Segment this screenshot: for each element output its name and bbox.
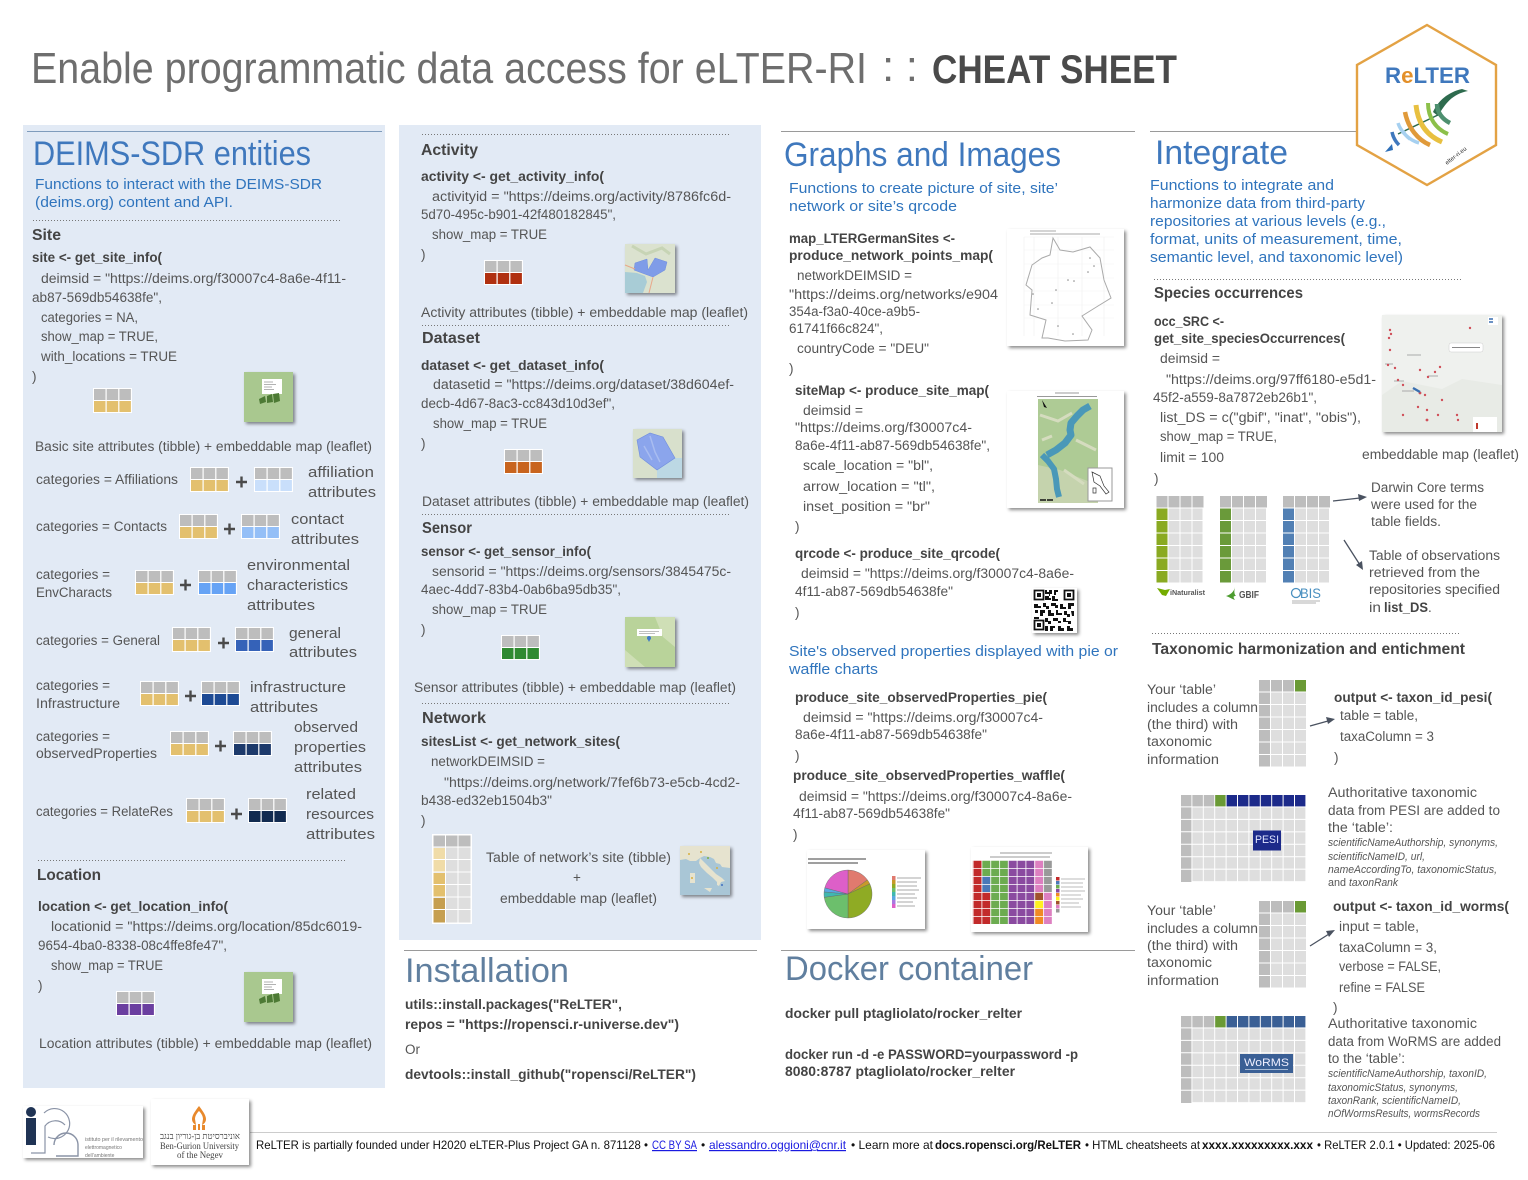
text: panel description: Functions to interact with the DEIMS-SDR [35,176,322,193]
panel: Docker container [781,950,1135,1079]
logo: Ben-Gurion University: of the Negev [177,1150,223,1161]
code: get_sensor_info: 4aec-4dd7-83b4-0ab6ba95db35", [421,582,621,597]
caption: activity attributes: Activity attributes (tibble) + embeddable map (leaflet) [421,305,748,320]
code: get_dataset_info: decb-4d67-8ac3-cc843d10d3ef", [421,396,615,411]
code: produce_site_qrcode: deimsid = "https://deims.org/f30007c4-8a6e- [801,566,1074,581]
code: get_site_info: categories = NA, [41,310,138,325]
code: get_site_speciesOccurrences: get_site_speciesOccurrences( [1154,331,1345,346]
code: taxon_id_worms: refine = FALSE [1339,980,1425,995]
code: docker commands: 8080:8787 ptagliolato/rocker_relter [785,1064,1016,1079]
code: produce_network_points_map: map_LTERGermanSites <- [789,231,955,246]
row: categories General: attributes [289,644,357,661]
logo: Ben-Gurion University: אוניברסיטת בן-גוריון בנגב [160,1131,241,1141]
code: produce_site_map: ) [795,519,800,534]
code: produce_site_map: siteMap <- produce_site_map( [795,383,989,398]
subheading: Taxonomic harmonization: Taxonomic harmonization and entichment [1152,641,1465,658]
icon: location map thumbnail [244,972,293,1022]
code: get_location_info: show_map = TRUE [51,958,163,973]
note: PESI added data: Authoritative taxonomic [1328,785,1477,800]
code: get_network_sites: "https://deims.org/network/7fef6b73-e5cb-4cd2- [444,775,740,790]
table: enriched PESI table [1181,795,1306,882]
code: get_sensor_info [421,544,731,637]
row: categories RelateRes [36,786,375,843]
heading: DEIMS-SDR entities: DEIMS-SDR entities [33,135,311,173]
code: get_site_info: site <- get_site_info( [32,250,162,265]
row: categories EnvCharacts: categories = [36,567,110,582]
code: get_sensor_info: show_map = TRUE [432,602,547,617]
note: PESI added data: the ‘table’: [1328,820,1393,835]
note: WoRMS added data: taxonomicStatus, synonyms, [1328,1082,1458,1094]
panel: Graphs and Images [781,132,1135,932]
row: categories EnvCharacts: characteristics [247,577,348,594]
heading: Installation: Installation [405,952,569,990]
logo: OBIS: BIS [1300,585,1321,601]
row: categories Affiliations: attributes [308,484,376,501]
code: get_site_info: with_locations = TRUE [40,349,177,364]
code: get_activity_info: activityid = "https://deims.org/activity/8786fc6d- [432,189,731,204]
code: taxon_id_pesi: taxaColumn = 3 [1340,729,1434,744]
code: get_dataset_info: dataset <- get_dataset_info( [421,358,605,373]
logo: ReLTER hexagon: ReLTER [1385,63,1470,88]
row: categories observedProperties: categories = [36,729,110,744]
row: categories General: categories = General [36,633,160,648]
note: table of observations: repositories specified [1369,582,1500,597]
code: get_site_speciesOccurrences: limit = 100 [1160,450,1224,465]
caption: embeddable map: embeddable map (leaflet) [1362,447,1519,462]
code: get_site_speciesOccurrences: "https://deims.org/97ff6180-e5d1- [1166,372,1376,387]
row: categories observedProperties: observedProperties [36,746,157,761]
code: get_site_info: deimsid = "https://deims.org/f30007c4-8a6e-4f11- [41,271,346,286]
subheading: observed properties charts [788,643,1118,678]
code: taxon_id_pesi: table = table, [1340,708,1418,723]
row: categories RelateRes: categories = RelateRes [36,804,173,819]
code: docker commands: docker pull ptagliolato/rocker_relter [785,1006,1023,1021]
code: produce_site_map: inset_position = "br" [803,499,930,514]
code: get_site_speciesOccurrences: show_map = TRUE, [1160,429,1277,444]
code: get_location_info: ) [38,978,42,993]
text: panel description: semantic level, and taxonomic level) [1150,249,1403,266]
code: get_site_info: ) [32,369,36,384]
table: iNaturalist [1156,496,1204,583]
logo: ReLTER hexagon [1357,25,1496,185]
row: categories Contacts: categories = Contacts [36,519,167,534]
code: get_dataset_info: datasetid = "https://deims.org/dataset/38d604ef- [433,377,734,392]
code: get_activity_info: 5d70-495c-b901-42f480182845", [421,207,616,222]
footer text: • ReLTER 2.0.1 • Updated: 2025-06 [1317,1138,1495,1152]
note: table of observations [1369,548,1500,615]
code: pie: ) [795,748,800,763]
text: panel description [789,180,1058,215]
heading: Docker container: Docker container [785,950,1033,988]
footer rule [250,1132,1497,1134]
row: categories Infrastructure: infrastructure [250,679,346,696]
code: produce_site_qrcode: qrcode <- produce_site_qrcode( [795,546,1000,561]
text: panel description: network or site’s qrcode [789,198,957,215]
text: network result description: Table of network’s site (tibble) [486,850,671,865]
footer text: xxxx.xxxxxxxxx.xxx [1202,1138,1313,1152]
code: produce_network_points_map [789,231,999,376]
icon: QR code [1032,588,1077,633]
text: network result description [486,850,671,906]
note: table of observations: . [1428,600,1432,615]
note: your table (WoRMS): Your ‘table’ [1147,903,1216,918]
note: Darwin Core [1370,480,1484,529]
title: CHEAT SHEET [932,48,1177,92]
code: get_activity_info: activity <- get_activity_info( [421,169,605,184]
row: categories observedProperties: properties [294,739,366,756]
note: WoRMS added data: to the ‘table’: [1328,1051,1405,1066]
table: OBIS [1283,496,1330,583]
table: input table (PESI) [1259,680,1306,767]
note: PESI added data: nameAccordingTo, taxonomicStatus, [1328,864,1497,876]
note: WoRMS added data: scientificNameAuthorship, taxonID, [1328,1068,1487,1080]
subheading: Network: Network [422,710,486,727]
code: produce_site_map: arrow_location = "tl", [803,479,935,494]
logo: IREA: dell’ambiente [85,1153,115,1159]
code: get_location_info: 9654-4ba0-8338-08c4ffe8fe47", [38,938,227,953]
panel: Integrate [1147,132,1519,1120]
footer text: docs.ropensci.org/ReLTER [935,1138,1081,1152]
icon: activity tibble [484,260,523,285]
row: categories Contacts [36,511,359,548]
code: produce_site_qrcode: ) [795,605,800,620]
note: PESI added data: scientificNameID, url, [1328,851,1425,863]
icon: dataset tibble [504,449,543,474]
code: produce_network_points_map: ) [789,361,794,376]
code: get_site_speciesOccurrences: occ_SRC <- [1154,314,1224,329]
code: produce_network_points_map: produce_network_points_map( [789,248,994,263]
row: categories RelateRes: related [306,786,356,803]
code: pie: deimsid = "https://deims.org/f30007c4- [803,710,1043,725]
note: table of observations: in [1369,600,1381,615]
row: categories Infrastructure: categories = [36,678,110,693]
caption: sensor attributes: Sensor attributes (tibble) + embeddable map (leaflet) [414,680,736,695]
chart: species occurrence map [1382,315,1502,432]
row: categories EnvCharacts: EnvCharacts [36,585,112,600]
footer text: • HTML cheatsheets at [1085,1138,1201,1152]
code: taxon_id_worms: input = table, [1339,919,1419,934]
subheading: Site: Site [32,227,61,244]
subheading: Location: Location [37,867,101,884]
code: get_sensor_info: sensor <- get_sensor_info( [421,544,591,559]
caption: location attributes: Location attributes (tibble) + embeddable map (leaflet) [39,1036,372,1051]
text: network result description: + [573,870,581,885]
footer text: • [701,1138,705,1152]
text: panel description [1150,177,1403,266]
code: produce_site_map: "https://deims.org/f30007c4- [795,420,972,435]
code: docker commands [785,1006,1078,1079]
note: your table (PESI): Your ‘table’ [1147,682,1216,697]
table: enriched WoRMS table [1181,1016,1306,1103]
icon: sensor map thumbnail [625,617,675,667]
subheading: Dataset: Dataset [422,330,480,347]
note: your table (WoRMS): includes a column [1147,921,1258,936]
row: categories EnvCharacts: attributes [247,597,315,614]
note: Darwin Core: Darwin Core terms [1371,480,1484,495]
note: your table (PESI) [1147,682,1258,767]
code: produce_network_points_map: networkDEIMSID = [797,268,912,283]
code: get_activity_info: ) [421,247,426,262]
chart: Lago Maggiore site map [1007,391,1124,508]
code: get_site_speciesOccurrences: deimsid = [1160,351,1220,366]
subheading: observed properties charts: Site's observed properties displayed with pie or [789,643,1118,660]
subheading: Activity: Activity [421,142,478,159]
logo: IREA [23,1106,143,1159]
caption: basic site attributes: Basic site attributes (tibble) + embeddable map (leaflet) [35,439,372,454]
row: categories EnvCharacts [36,557,350,614]
row: categories Affiliations: affiliation [308,464,374,481]
subheading: Sensor: Sensor [422,520,472,537]
code: produce_network_points_map: 354a-f3a0-40ce-a9b5- [789,304,920,319]
chart: Germany sites map [1007,229,1124,346]
panel: Activity, Dataset, Sensor, Network [399,125,761,940]
code: produce_site_qrcode: 4f11-ab87-569db54638fe" [795,584,953,599]
row: categories EnvCharacts: environmental [247,557,350,574]
note: your table (WoRMS) [1147,903,1258,988]
code: produce_network_points_map: 61741f66c824", [789,321,883,336]
icon: site map thumbnail [244,372,293,422]
note: WoRMS added data: data from WoRMS are added [1328,1034,1501,1049]
arrow: to observations note [1344,540,1363,570]
logo: Ben-Gurion University: Ben-Gurion University [160,1142,239,1152]
logo: WoRMS: WoRMS [1244,1057,1289,1069]
note: table of observations: list_DS [1384,600,1428,615]
logo: GBIF [1226,587,1259,601]
title: : : [882,42,918,91]
row: categories General [36,625,357,661]
logo: GBIF: GBIF [1239,590,1259,601]
code: get_site_speciesOccurrences: 45f2-a559-8a7872eb26b1", [1153,390,1317,405]
arrow: table to taxon_id_pesi [1310,717,1335,726]
note: your table (PESI): (the third) with [1147,717,1238,732]
code: get_sensor_info: ) [421,622,426,637]
code: produce_site_map: 8a6e-4f11-ab87-569db54638fe", [795,438,990,453]
code: get_network_sites: sitesList <- get_network_sites( [421,734,620,749]
note: your table (WoRMS): (the third) with [1147,938,1238,953]
code: get_network_sites: ) [421,813,426,828]
row: categories General: general [289,625,341,642]
chart: pie chart [807,850,925,929]
code: get_network_sites: b438-ed32eb1504b3" [421,793,552,808]
code: waffle: deimsid = "https://deims.org/f30007c4-8a6e- [799,789,1072,804]
note: PESI added data: taxonRank [1349,877,1398,889]
code: taxon_id_worms: output <- taxon_id_worms( [1333,899,1510,914]
logo: PESI: PESI [1255,834,1279,846]
icon: basic site tibble [93,388,132,413]
code: docker commands: docker run -d -e PASSWORD=yourpassword -p [785,1047,1078,1062]
icon: sensor tibble [501,635,540,660]
row: categories Affiliations: categories = Affiliations [36,472,178,487]
code: get_activity_info: show_map = TRUE [432,227,547,242]
note: table of observations: retrieved from the [1369,565,1480,580]
text: panel description: format, units of measurement, time, [1150,231,1402,248]
row: categories RelateRes: resources [306,806,374,823]
panel: Installation [404,950,757,1082]
code: get_network_sites [421,734,740,828]
code: produce_network_points_map: countryCode = "DEU" [797,341,929,356]
note: WoRMS added data: nOfWormsResults, wormsRecords [1328,1108,1480,1120]
text: panel description: harmonize data from third-party [1150,195,1366,212]
code: get_activity_info [421,169,731,262]
note: PESI added data [1328,785,1500,889]
code: taxon_id_worms [1333,899,1510,1015]
code: get_site_speciesOccurrences: list_DS = c("gbif", "inat", "obis"), [1160,410,1361,425]
note: Darwin Core: were used for the [1370,497,1477,512]
subheading: Species occurrences: Species occurrences [1154,285,1303,302]
code: pie: 8a6e-4f11-ab87-569db54638fe" [795,727,987,742]
subheading: observed properties charts: waffle charts [788,661,878,678]
chart: waffle chart [971,847,1088,932]
row: categories Infrastructure [36,678,346,716]
note: WoRMS added data: taxonRank, scientificNameID, [1328,1095,1461,1107]
row: categories Contacts: contact [291,511,345,528]
icon: network sites table [432,834,472,924]
logo: Ben-Gurion University [151,1099,249,1165]
code: waffle [793,768,1072,842]
code: install commands: devtools::install_github("ropensci/ReLTER") [405,1067,696,1082]
row: categories Affiliations [36,464,376,501]
code: get_dataset_info: show_map = TRUE [433,416,547,431]
code: get_site_info: show_map = TRUE, [41,329,158,344]
code: taxon_id_pesi: output <- taxon_id_pesi( [1334,690,1493,705]
code: get_dataset_info: ) [421,436,426,451]
arrow: to Darwin Core note [1333,494,1367,501]
note: PESI added data: data from PESI are added to [1328,803,1500,818]
code: waffle: 4f11-ab87-569db54638fe" [793,806,950,821]
code: taxon_id_worms: verbose = FALSE, [1339,959,1441,974]
logo: OBIS [1292,585,1321,603]
text: panel description: Functions to create picture of site, site’ [789,180,1058,197]
logo: IREA: istituto per il rilevamento [85,1137,143,1143]
footer text: • Learn more at [851,1138,934,1152]
row: categories RelateRes: attributes [306,826,375,843]
logo: iNaturalist: iNaturalist [1170,588,1205,597]
code: produce_site_map: scale_location = "bl", [803,458,933,473]
footer text [256,1138,1495,1152]
code: pie: produce_site_observedProperties_pie( [795,690,1048,705]
note: your table (PESI): information [1147,752,1219,767]
row: categories Infrastructure: Infrastructure [36,696,120,711]
code: get_location_info: location <- get_location_info( [38,899,229,914]
text: network result description: embeddable map (leaflet) [500,891,657,906]
code: produce_site_map [795,383,990,534]
footer text: alessandro.oggioni@cnr.it [709,1138,847,1152]
code: pie [795,690,1048,763]
arrow: table to taxon_id_worms [1310,930,1335,946]
text: panel description: Functions to integrate and [1150,177,1334,194]
row: categories observedProperties: attributes [294,759,362,776]
title: Enable programmatic data access for eLTER-RI [31,44,867,93]
table: GBIF [1220,496,1267,583]
text: panel description [35,176,322,211]
note: your table (PESI): taxonomic [1147,734,1212,749]
logo: ReLTER hexagon: elter-ri.eu [1445,146,1468,167]
code: get_site_info: ab87-569db54638fe", [32,290,162,305]
text: panel description: (deims.org) content and API. [35,194,233,211]
code: get_site_speciesOccurrences [1153,314,1376,486]
code: get_sensor_info: sensorid = "https://deims.org/sensors/3845475c- [432,564,731,579]
code: get_site_speciesOccurrences: ) [1154,471,1158,486]
code: install commands: utils::install.packages("ReLTER", [405,997,622,1012]
code: waffle: ) [793,827,798,842]
note: WoRMS added data: Authoritative taxonomic [1328,1016,1477,1031]
row: categories observedProperties [36,719,366,776]
note: PESI added data: and [1328,877,1346,889]
code: taxon_id_worms: taxaColumn = 3, [1339,940,1437,955]
note: your table (PESI): includes a column [1147,700,1258,715]
note: your table (WoRMS): taxonomic [1147,955,1212,970]
icon: Italy network map [680,846,730,895]
footer text: CC BY SA [652,1138,697,1152]
code: taxon_id_pesi [1334,690,1493,765]
code: produce_site_qrcode [795,546,1074,620]
code: install commands: repos = "https://ropensci.r-universe.dev") [405,1017,679,1032]
icon: dataset map thumbnail [633,429,682,478]
row: categories Infrastructure: attributes [250,699,318,716]
footer text: ReLTER is partially founded under H2020 eLTER-Plus Project GA n. 871128 • [256,1138,648,1152]
panel: DEIMS-SDR entities [23,125,385,1088]
note: PESI added data: scientificNameAuthorship, synonyms, [1328,837,1498,849]
icon: activity map thumbnail [625,244,675,293]
row: categories observedProperties: observed [294,719,358,736]
code: waffle: produce_site_observedProperties_waffle( [793,768,1065,783]
code: get_location_info: locationid = "https://deims.org/location/85dc6019- [51,919,362,934]
code: produce_site_map: deimsid = [803,403,863,418]
code: get_dataset_info [421,358,734,451]
code: install commands: Or [405,1042,421,1057]
note: table of observations: Table of observations [1369,548,1500,563]
note: your table (WoRMS): information [1147,973,1219,988]
text: panel description: repositories at various levels (e.g., [1150,213,1386,230]
note: Darwin Core: table fields. [1371,514,1441,529]
caption: dataset attributes: Dataset attributes (tibble) + embeddable map (leaflet) [422,494,749,509]
table: input table (WoRMS) [1259,901,1306,988]
heading: Integrate: Integrate [1155,134,1288,172]
icon: location tibble [116,991,155,1016]
code: install commands [405,997,696,1082]
code: produce_network_points_map: "https://deims.org/networks/e904 [789,287,999,302]
code: taxon_id_pesi: ) [1334,750,1338,765]
code: taxon_id_worms: ) [1333,1000,1338,1015]
note: WoRMS added data [1328,1016,1501,1120]
code: get_network_sites: networkDEIMSID = [431,754,545,769]
logo: IREA: elettromagnetico [85,1145,122,1151]
heading: Graphs and Images: Graphs and Images [784,136,1061,174]
row: categories Contacts: attributes [291,531,359,548]
code: get_site_info [32,250,346,384]
code: get_location_info [38,899,362,993]
